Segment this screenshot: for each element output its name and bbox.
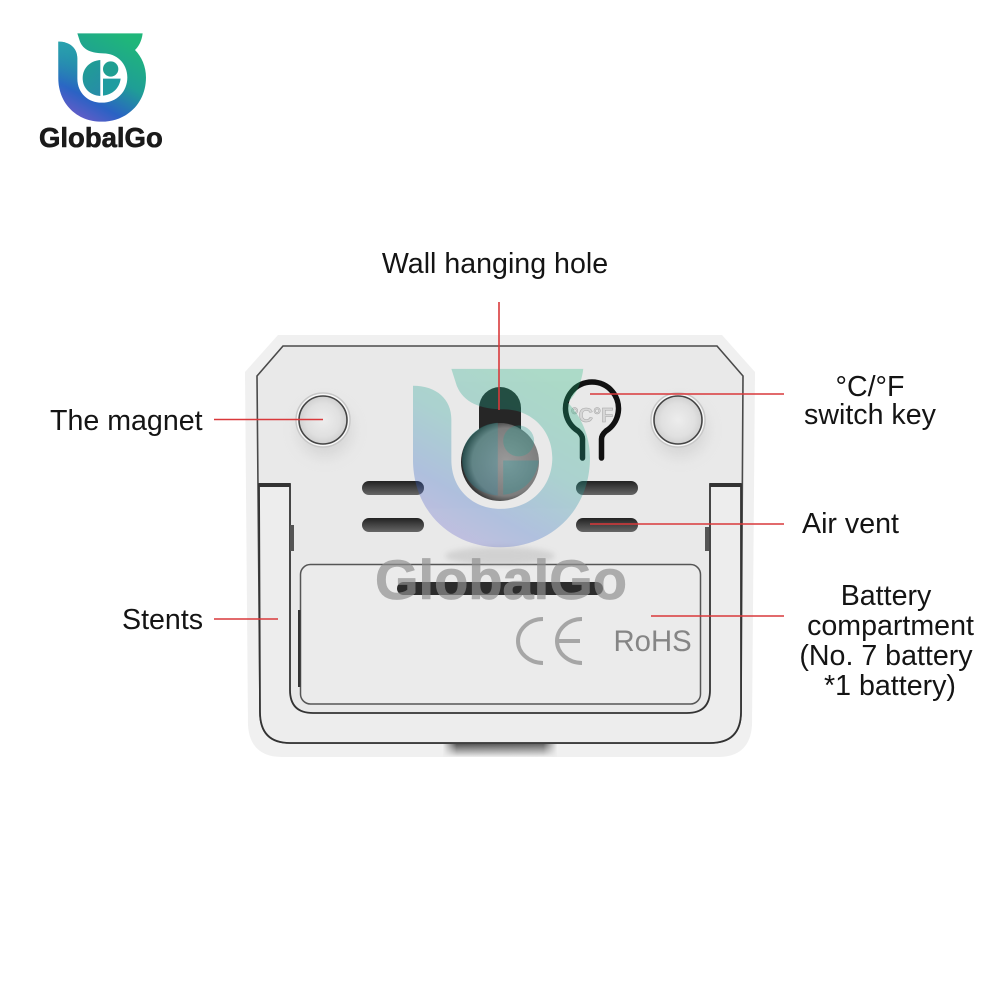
bottom shadow slot [443,744,557,757]
watermark reflection [445,547,555,565]
callout: battery compartment [651,580,974,702]
device back panel [245,335,755,757]
air vents [362,481,638,532]
RoHS mark: RoHS [614,625,692,658]
callout: temperature switch key [590,371,937,431]
magnet left [296,393,351,456]
callout: wall hanging hole: Wall hanging hole [382,248,608,280]
CE mark [518,619,582,663]
magnet right [651,393,706,456]
callout: battery compartment: (No. 7 battery [799,640,973,672]
callout: battery compartment: Battery [841,580,932,612]
temperature switch key [566,382,618,458]
device inner face [257,346,743,743]
callout: stents: Stents [122,604,203,636]
callout: temperature switch key: switch key [804,399,937,431]
watermark mark [413,369,590,547]
watermark wordmark: GlobalGo [375,548,627,611]
device outer body [245,335,755,757]
logo mark [58,33,146,122]
watermark logo [375,369,627,611]
stent hinge shading [259,483,741,551]
battery cover slot [397,582,603,595]
callout: battery compartment: compartment [807,610,974,642]
logo wordmark: GlobalGo [39,122,163,153]
logo: GlobalGo [39,33,163,153]
temperature switch key: °C°F [571,405,613,427]
callout: air vent: Air vent [802,508,899,540]
callout: the magnet: The magnet [50,405,203,437]
callout: temperature switch key: °C/°F [836,371,904,403]
callout: battery compartment: *1 battery) [824,670,956,702]
battery compartment cover [298,564,700,704]
left stent [259,484,741,743]
wall hanging keyhole [461,387,539,501]
